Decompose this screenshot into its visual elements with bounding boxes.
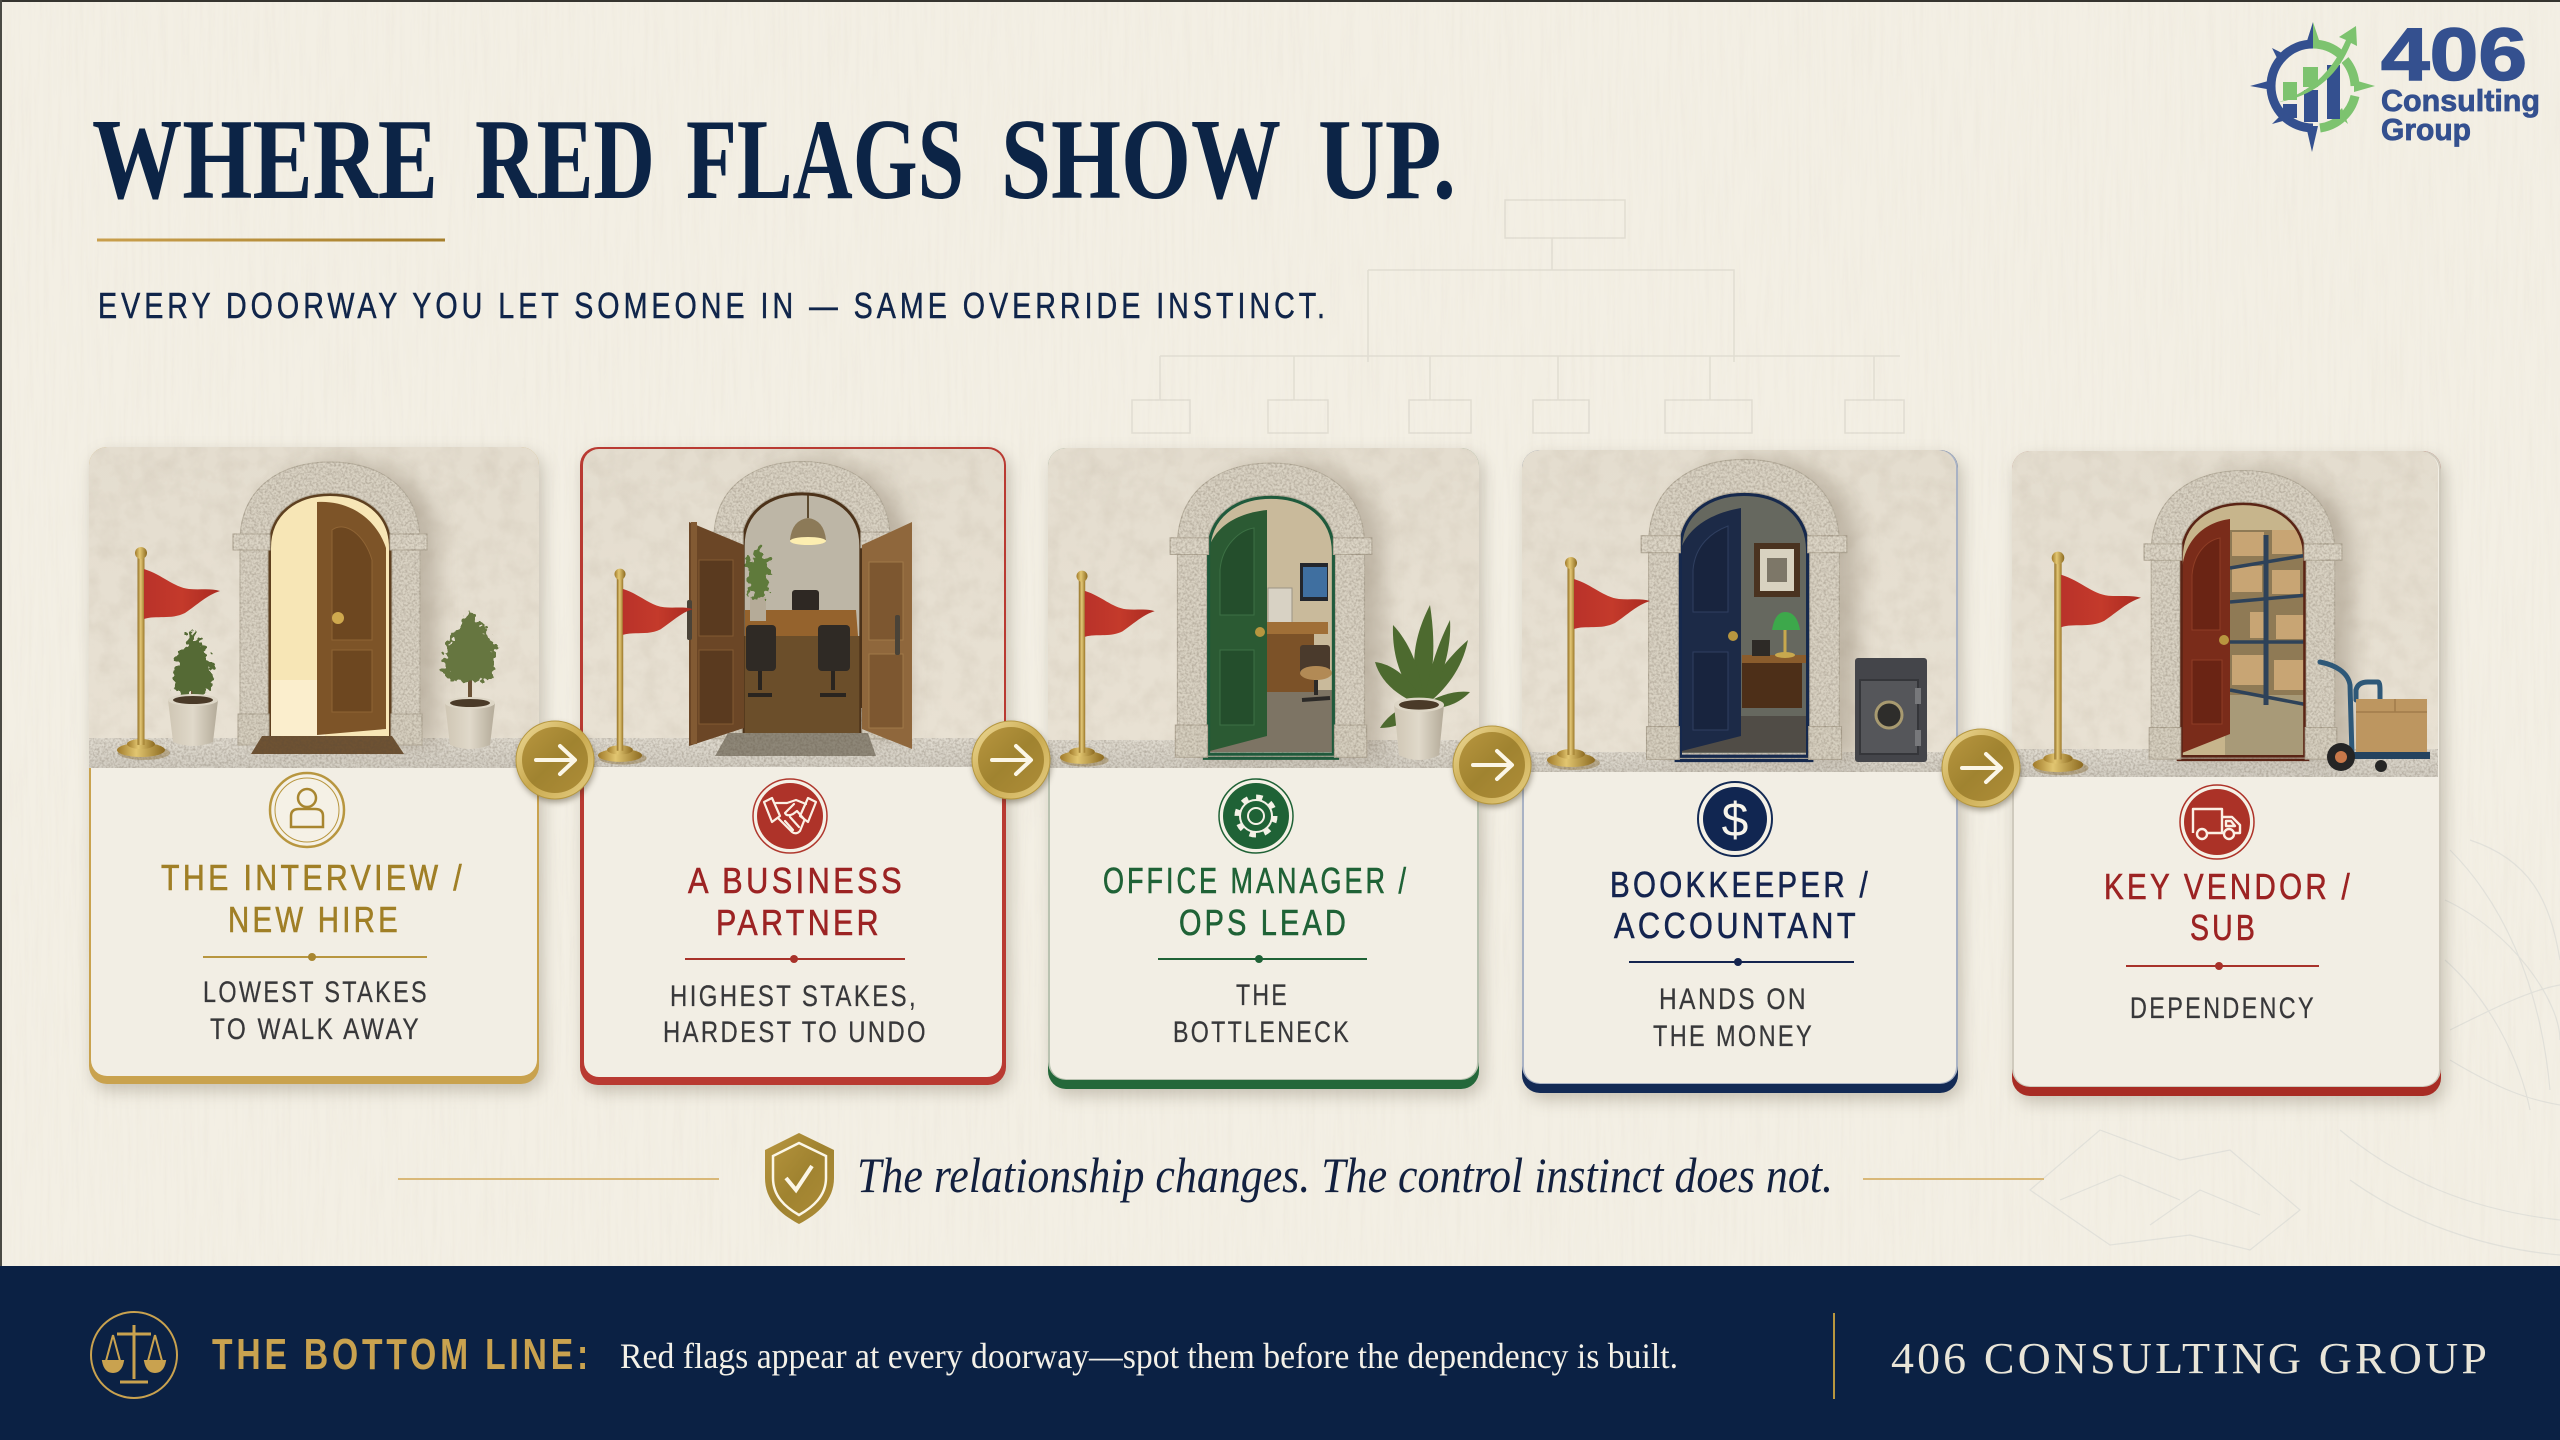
card 5 description: DEPENDENCY xyxy=(2130,992,2316,1025)
logo compass mark xyxy=(2250,22,2375,152)
card 1: the interview / new hire xyxy=(89,447,539,1084)
icon: scales xyxy=(91,1312,177,1398)
card 3 description xyxy=(1173,979,1351,1049)
card 2: a business partner xyxy=(580,447,1006,1085)
doormat xyxy=(715,733,876,756)
bottom line label: THE BOTTOM LINE: xyxy=(212,1330,592,1379)
tagline right rule xyxy=(1863,1178,2044,1180)
card 1 description: LOWEST STAKES xyxy=(203,976,429,1009)
doormat xyxy=(251,736,404,754)
card 1 heading: NEW HIRE xyxy=(228,899,401,940)
arrow coin 1 xyxy=(516,721,594,799)
title gold rule xyxy=(97,238,445,242)
red flag xyxy=(1060,571,1155,767)
card 1 description xyxy=(203,976,429,1046)
footer divider xyxy=(1833,1313,1835,1399)
card 3 doorway scene xyxy=(1048,448,1479,769)
icon: person xyxy=(270,773,344,847)
icon: dollar xyxy=(1698,782,1772,856)
icon: gear xyxy=(1219,779,1293,853)
subtitle: EVERY DOORWAY YOU LET SOMEONE IN — SAME OVERRIDE INSTINCT. xyxy=(98,285,1329,326)
card 4 description: HANDS ON xyxy=(1659,983,1808,1016)
arrow coin 4 xyxy=(1942,729,2020,807)
warehouse interior xyxy=(2175,495,2311,755)
card 2 description: HIGHEST STAKES, xyxy=(670,980,918,1013)
office interior xyxy=(1210,499,1332,752)
card 2 heading: PARTNER xyxy=(716,902,882,943)
faint org chart watermark xyxy=(1132,200,1904,433)
card 4 heading xyxy=(1610,864,1871,946)
title: WHERE xyxy=(92,96,438,224)
right plant xyxy=(443,612,496,749)
hand truck with box xyxy=(2320,662,2430,772)
card 3 heading: OFFICE MANAGER / xyxy=(1103,860,1409,901)
card 5 divider xyxy=(2126,962,2319,970)
card 3: office manager / ops lead xyxy=(1048,448,1479,1089)
arrow coin 3 xyxy=(1453,726,1531,804)
logo: 406 Consulting Group xyxy=(2250,13,2540,152)
card 4 description xyxy=(1653,983,1814,1053)
card 1 description: TO WALK AWAY xyxy=(210,1013,421,1046)
footer brand: 406 CONSULTING GROUP xyxy=(1891,1334,2490,1383)
title: UP. xyxy=(1318,96,1456,224)
icon: shield xyxy=(765,1133,834,1224)
red flag xyxy=(598,569,693,765)
tagline row xyxy=(398,1133,2044,1224)
title: FLAGS xyxy=(686,96,964,224)
navy door xyxy=(1678,508,1741,752)
card 4 heading: ACCOUNTANT xyxy=(1614,905,1859,946)
faint sketch watermark lower right xyxy=(2030,840,2560,1255)
arrow coin 2 xyxy=(972,721,1050,799)
logo wordmark: Consulting xyxy=(2381,83,2540,118)
card 5 heading xyxy=(2104,866,2353,948)
stone arch xyxy=(1170,463,1372,757)
logo wordmark: Group xyxy=(2381,112,2471,147)
interior light xyxy=(271,496,389,736)
logo wordmark xyxy=(2381,13,2540,147)
card 3 body xyxy=(1048,448,1479,1089)
study interior xyxy=(1682,496,1806,753)
tagline text: The relationship changes. The control instinct does not. xyxy=(857,1147,1833,1203)
left plant xyxy=(168,630,218,746)
stone arch xyxy=(2144,470,2342,759)
card 2 divider xyxy=(685,955,905,963)
card 4 heading: BOOKKEEPER / xyxy=(1610,864,1871,905)
icon: dollar: $ xyxy=(1722,794,1748,847)
title: RED xyxy=(475,96,655,224)
card 5: key vendor / sub xyxy=(2012,451,2441,1096)
red flag xyxy=(117,547,220,760)
card 3 description: BOTTLENECK xyxy=(1173,1016,1351,1049)
stone arch xyxy=(233,462,427,745)
card 3 description: THE xyxy=(1236,979,1289,1012)
footer band xyxy=(0,1266,2560,1440)
icon: handshake xyxy=(753,779,827,853)
card 5 heading: SUB xyxy=(2190,907,2258,948)
card 1 body xyxy=(89,447,539,1084)
card 2 heading: A BUSINESS xyxy=(688,860,905,901)
logo wordmark: 406 xyxy=(2381,13,2527,96)
stone arch xyxy=(707,462,897,739)
card 5 heading: KEY VENDOR / xyxy=(2104,866,2353,907)
card 2 body xyxy=(580,447,1006,1085)
card 3 heading: OPS LEAD xyxy=(1179,902,1349,943)
bottom line message: Red flags appear at every doorway—spot them before the dependency is built. xyxy=(620,1336,1678,1376)
card 3 heading xyxy=(1103,860,1409,943)
card 1 doorway scene xyxy=(89,447,539,769)
card 4 description: THE MONEY xyxy=(1653,1020,1814,1053)
conference room xyxy=(744,496,860,733)
card 4: bookkeeper / accountant xyxy=(1522,450,1958,1093)
green door xyxy=(1206,510,1267,752)
title xyxy=(92,96,1456,224)
card 1 heading xyxy=(161,857,465,940)
open wooden door xyxy=(317,502,386,735)
card 5 body xyxy=(2012,451,2441,1096)
potted palm xyxy=(1375,605,1470,760)
card 3 divider xyxy=(1158,955,1367,963)
card 4 divider xyxy=(1629,958,1854,966)
red flag xyxy=(2033,552,2141,775)
card 4 body xyxy=(1522,450,1958,1093)
steel safe xyxy=(1855,658,1927,762)
card 4 doorway scene xyxy=(1522,450,1958,773)
stone arch xyxy=(1641,459,1847,759)
red flag xyxy=(1547,557,1650,770)
card 1 divider xyxy=(203,953,427,961)
card 2 doorway scene xyxy=(583,449,1005,769)
red door xyxy=(2182,519,2230,753)
card 1 heading: THE INTERVIEW / xyxy=(161,857,465,898)
card 2 description xyxy=(663,980,928,1049)
left open door xyxy=(687,522,744,746)
card 2 description: HARDEST TO UNDO xyxy=(663,1016,928,1049)
card 2 heading xyxy=(688,860,905,943)
tagline left rule xyxy=(398,1178,719,1180)
right open door xyxy=(862,522,912,749)
card 5 doorway scene xyxy=(2012,451,2441,778)
icon: truck xyxy=(2180,785,2254,859)
title: SHOW xyxy=(1001,96,1281,224)
